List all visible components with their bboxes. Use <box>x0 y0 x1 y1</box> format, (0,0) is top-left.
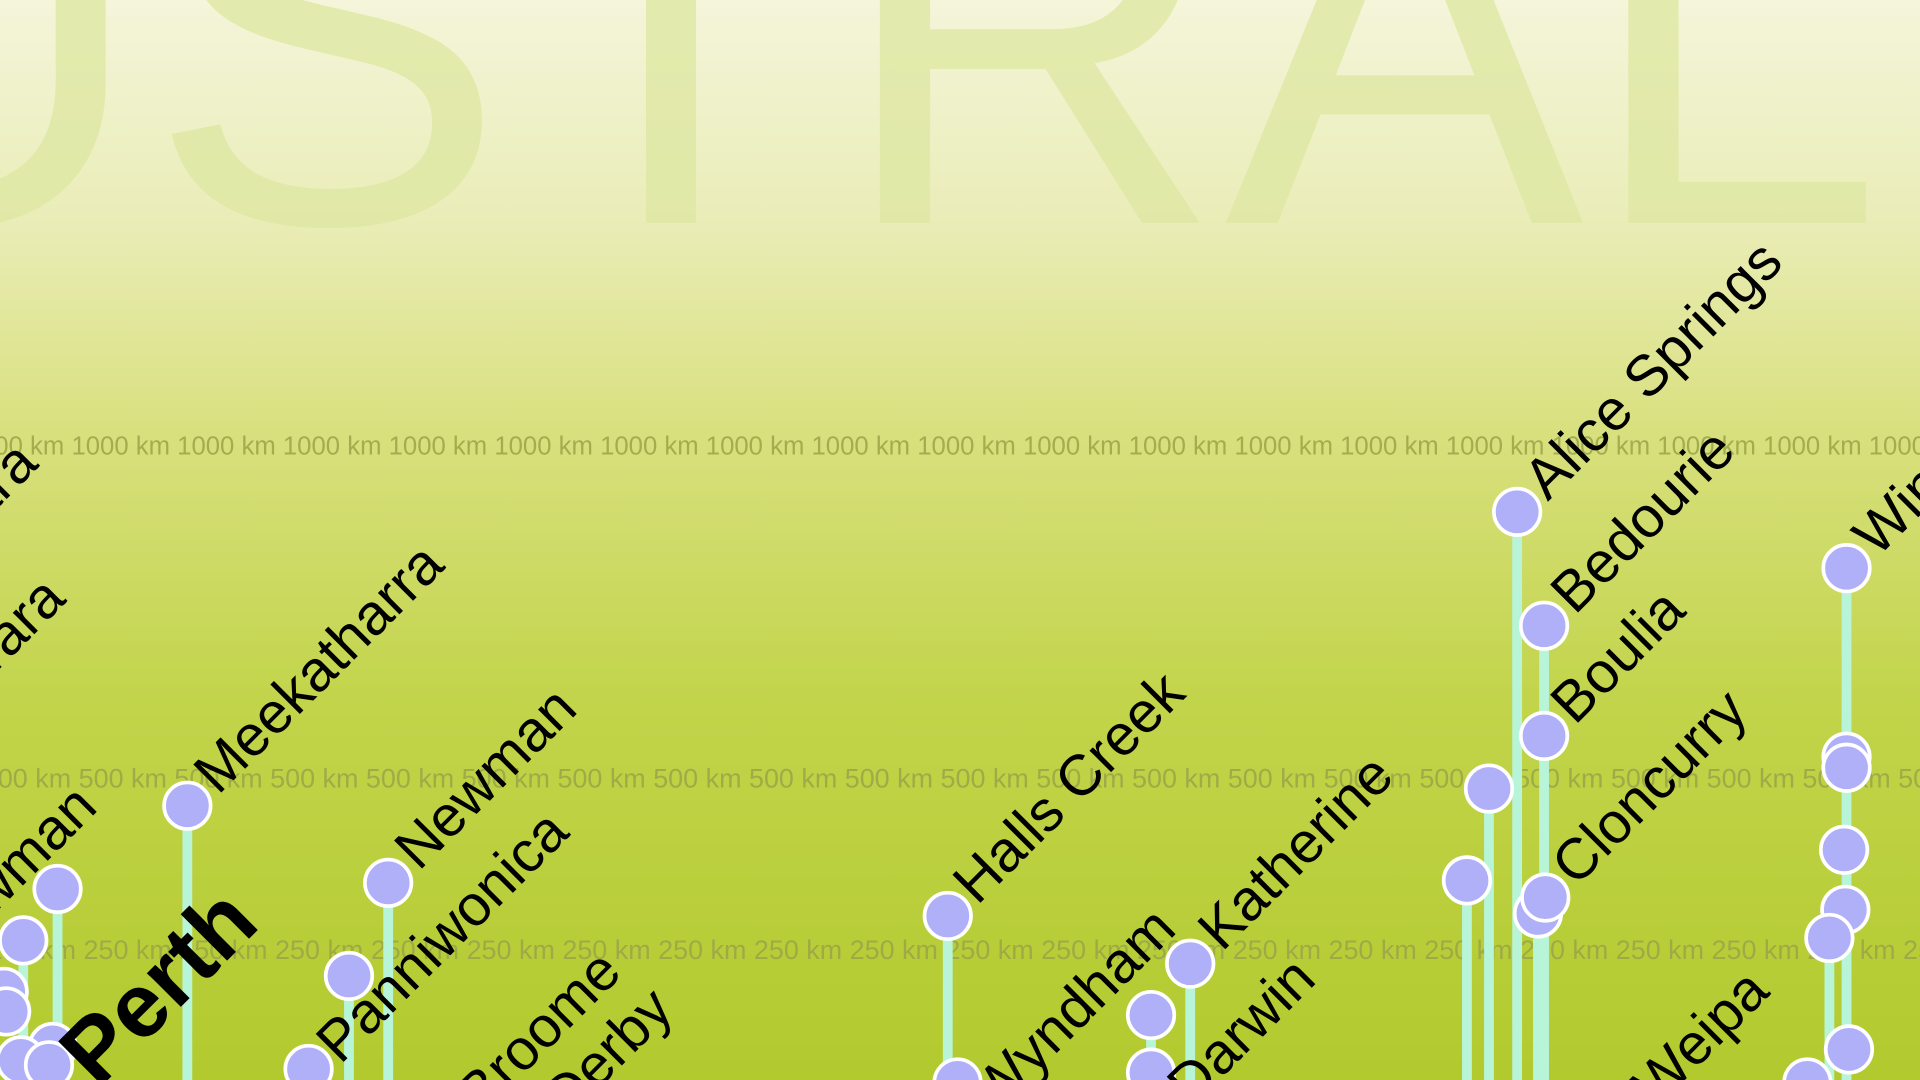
city labels <box>0 229 1920 1080</box>
city labels: Panniwonica <box>304 798 580 1074</box>
city labels: Boulia <box>1539 577 1697 735</box>
city labels: Cloncurry <box>1540 677 1759 897</box>
city labels: Halls Creek <box>941 660 1197 915</box>
city labels: Meekatharra <box>182 531 456 805</box>
lollipop points <box>0 489 1872 1080</box>
city labels: Katherine <box>1186 742 1405 962</box>
lollipop stems <box>23 512 1847 1080</box>
distance scale labels <box>0 432 1920 965</box>
city labels: Newman <box>383 675 589 881</box>
city labels: Bedourie <box>1539 417 1747 625</box>
city labels: Alice Springs <box>1512 229 1794 511</box>
